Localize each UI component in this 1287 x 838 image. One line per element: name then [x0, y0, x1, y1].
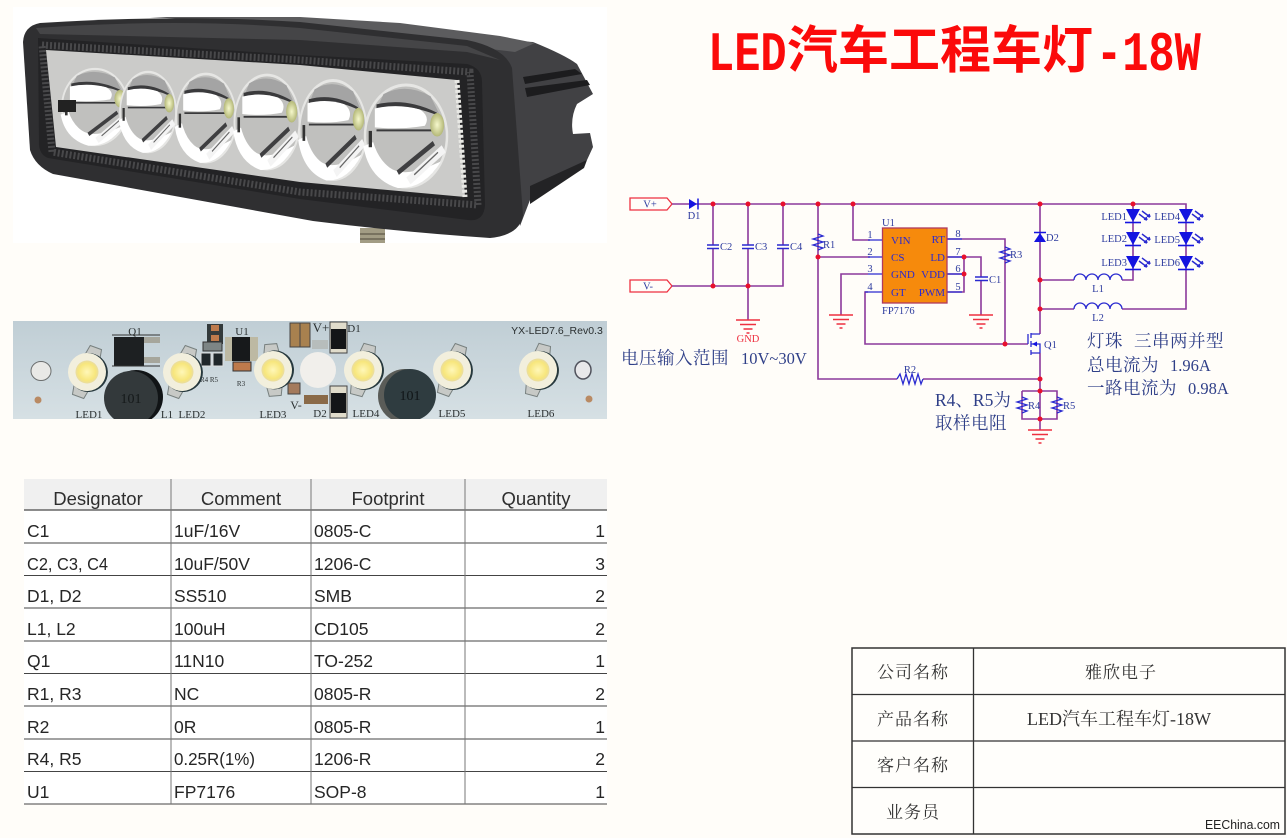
wires [672, 204, 1186, 430]
table rows: TO-252 [314, 651, 373, 671]
table rows: NC [174, 684, 199, 704]
table rows: 1 [595, 782, 605, 802]
table header [24, 479, 607, 510]
table rows: 10uF/50V [174, 554, 250, 574]
inductors: 101 [120, 392, 142, 407]
inductors L1 L2: L1 [1092, 284, 1104, 295]
resistors: R4 [1028, 401, 1041, 412]
MOSFET Q1 [1028, 333, 1057, 355]
capacitors C2 C3 C4: C3 [755, 242, 767, 253]
controller FP7176: CS [891, 252, 904, 264]
PCB photo [13, 320, 607, 425]
controller U1 and passives [200, 324, 258, 388]
title: -18W [1096, 24, 1202, 88]
lamp lens panel [46, 50, 465, 197]
lamp reflectors [58, 69, 447, 188]
diodes and capacitors [288, 322, 347, 418]
info box: 客户名称 [877, 756, 949, 775]
controller FP7176: LD [930, 252, 945, 264]
table rows: 0.25R(1%) [174, 749, 255, 769]
controller FP7176: 2 [867, 247, 873, 258]
capacitors C2 C3 C4 [707, 242, 803, 253]
inductors L1 L2: L2 [1092, 313, 1104, 324]
controller FP7176: 4 [867, 282, 873, 293]
controller FP7176: VDD [921, 269, 945, 281]
table rows: 2 [595, 684, 605, 704]
LED current note: 一路电流为 [1087, 378, 1177, 398]
lamp front frame [23, 18, 523, 238]
table rows: SMB [314, 586, 352, 606]
controller FP7176: 6 [955, 264, 961, 275]
table rows [27, 521, 605, 802]
diode D2: D2 [1046, 233, 1059, 244]
table rows: C1 [27, 521, 49, 541]
info box: LED汽车工程车灯-18W [1027, 709, 1211, 729]
table rows: 100uH [174, 619, 226, 639]
info box [852, 648, 1285, 834]
ground symbols: GND [737, 334, 760, 345]
LED current note: 总电流为 [1087, 355, 1159, 375]
table rows: L1, L2 [27, 619, 76, 639]
table rows: 0R [174, 717, 196, 737]
table rows: 0805-R [314, 717, 371, 737]
controller FP7176: 7 [955, 247, 961, 258]
LED current note: 灯珠 [1087, 331, 1123, 351]
controller U1 and passives: R4 R5 [200, 376, 219, 384]
diode D1: D1 [688, 211, 700, 222]
LED current note: 0.98A [1188, 379, 1229, 398]
resistors: R2 [904, 365, 916, 376]
table rows: 1 [595, 521, 605, 541]
PCB silkscreen labels: D1 [347, 323, 361, 335]
controller FP7176: U1 [882, 218, 895, 229]
transistor Q1 [112, 335, 160, 366]
inductors L1 L2 [1074, 274, 1122, 324]
table rows: C2, C3, C4 [27, 554, 108, 574]
info box: 产品名称 [877, 710, 949, 729]
resistors [813, 234, 1075, 413]
PCB silkscreen labels: L1 [161, 409, 173, 421]
table rows: R1, R3 [27, 684, 81, 704]
PCB silkscreen labels: LED1 [76, 409, 102, 421]
LED current note [1087, 331, 1229, 398]
table rows: 0805-R [314, 684, 371, 704]
LED current note: 三串两并型 [1134, 331, 1224, 351]
controller FP7176: VIN [891, 235, 911, 247]
controller U1 and passives: R3 [237, 380, 246, 388]
table rows: 11N10 [174, 651, 225, 671]
title: LED [708, 24, 787, 88]
table header: Designator [53, 488, 143, 509]
table rows: R4, R5 [27, 749, 81, 769]
sense resistor note [935, 390, 1011, 433]
PCB silkscreen labels: D2 [313, 408, 327, 420]
LED strings [1101, 209, 1203, 270]
sense resistor note: R4、R5为 [935, 390, 1011, 410]
inductors: 101 [400, 389, 420, 404]
info box: 雅欣电子 [1085, 663, 1157, 682]
controller FP7176: 1 [867, 230, 873, 241]
sense resistor note: 取样电阻 [935, 413, 1007, 433]
lamp side body [480, 39, 593, 226]
table rows: 1206-R [314, 749, 371, 769]
capacitors C2 C3 C4: C2 [720, 242, 732, 253]
diode D1 [688, 198, 700, 222]
PCB silkscreen labels: V- [290, 398, 302, 412]
voltage note: 电压输入范围 [621, 348, 729, 368]
PCB silkscreen labels: LED6 [528, 408, 555, 420]
table rows: U1 [27, 782, 49, 802]
controller FP7176: GND [891, 269, 915, 281]
input ports: V+ [643, 200, 657, 210]
info box: 公司名称 [877, 663, 949, 682]
LED strings: LED4 [1154, 212, 1181, 223]
PCB silkscreen labels: LED4 [353, 408, 380, 420]
LED emitters [68, 342, 559, 400]
title: 汽车工程车灯 [787, 9, 1093, 83]
table rows: 1uF/16V [174, 521, 240, 541]
controller FP7176: GT [891, 287, 906, 299]
controller FP7176: RT [932, 234, 945, 246]
table rows: D1, D2 [27, 586, 81, 606]
capacitors C2 C3 C4: C4 [790, 242, 803, 253]
resistors: R3 [1010, 250, 1022, 261]
info box: 业务员 [886, 803, 941, 822]
table rows: R2 [27, 717, 49, 737]
controller FP7176: 3 [867, 264, 873, 275]
LED strings: LED1 [1101, 212, 1127, 223]
watermark: EEChina.com [1205, 817, 1280, 832]
table rows: SS510 [174, 586, 227, 606]
inductors [104, 369, 436, 419]
voltage note: 10V~30V [741, 349, 807, 368]
PCB silkscreen labels: YX-LED7.6_Rev0.3 [511, 325, 603, 337]
table rows: 1 [595, 651, 605, 671]
table rows: 2 [595, 586, 605, 606]
PCB silkscreen labels: LED2 [179, 409, 205, 421]
LED strings: LED2 [1101, 234, 1127, 245]
BOM table [24, 479, 607, 804]
LED strings: LED5 [1154, 235, 1180, 246]
table rows: SOP-8 [314, 782, 367, 802]
table rows: 1206-C [314, 554, 371, 574]
resistors: R5 [1063, 401, 1075, 412]
PCB silkscreen labels: Q1 [128, 326, 142, 338]
controller FP7176: 5 [955, 282, 961, 293]
LED current note: 1.96A [1170, 356, 1211, 375]
mounting screw [360, 228, 385, 243]
capacitor C1 [975, 275, 1001, 286]
controller FP7176: PWM [919, 287, 945, 299]
input ports: V- [643, 282, 654, 292]
table rows: 0805-C [314, 521, 371, 541]
table rows: FP7176 [174, 782, 235, 802]
table rows: 2 [595, 749, 605, 769]
input ports [630, 198, 672, 292]
mounting holes [31, 352, 592, 404]
lamp photo [13, 7, 607, 243]
table header: Footprint [351, 488, 425, 509]
PCB silkscreen labels: LED5 [439, 408, 466, 420]
lamp inner bezel [38, 38, 485, 220]
schematic [621, 198, 1229, 443]
LED strings: LED6 [1154, 258, 1180, 269]
ground symbols [736, 315, 1052, 443]
PCB silkscreen labels: LED3 [260, 409, 287, 421]
voltage note [621, 348, 807, 368]
MOSFET Q1: Q1 [1044, 340, 1057, 351]
LED strings: LED3 [1101, 258, 1127, 269]
resistors: R1 [823, 240, 835, 251]
junction dots [710, 202, 1136, 422]
controller FP7176: 8 [955, 229, 961, 240]
table rows: 3 [595, 554, 605, 574]
table rows: CD105 [314, 619, 368, 639]
table header: Comment [201, 488, 281, 509]
table header: Quantity [502, 488, 571, 509]
capacitor C1: C1 [989, 275, 1001, 286]
controller FP7176 [865, 218, 962, 317]
table rows: 2 [595, 619, 605, 639]
table rows: Q1 [27, 651, 50, 671]
table rows: 1 [595, 717, 605, 737]
diode D2 [1034, 232, 1059, 244]
PCB silkscreen labels: V+ [313, 320, 329, 335]
controller FP7176: FP7176 [882, 306, 915, 317]
PCB silkscreen labels [76, 320, 603, 421]
title [708, 9, 1202, 88]
PCB silkscreen labels: U1 [235, 326, 249, 338]
